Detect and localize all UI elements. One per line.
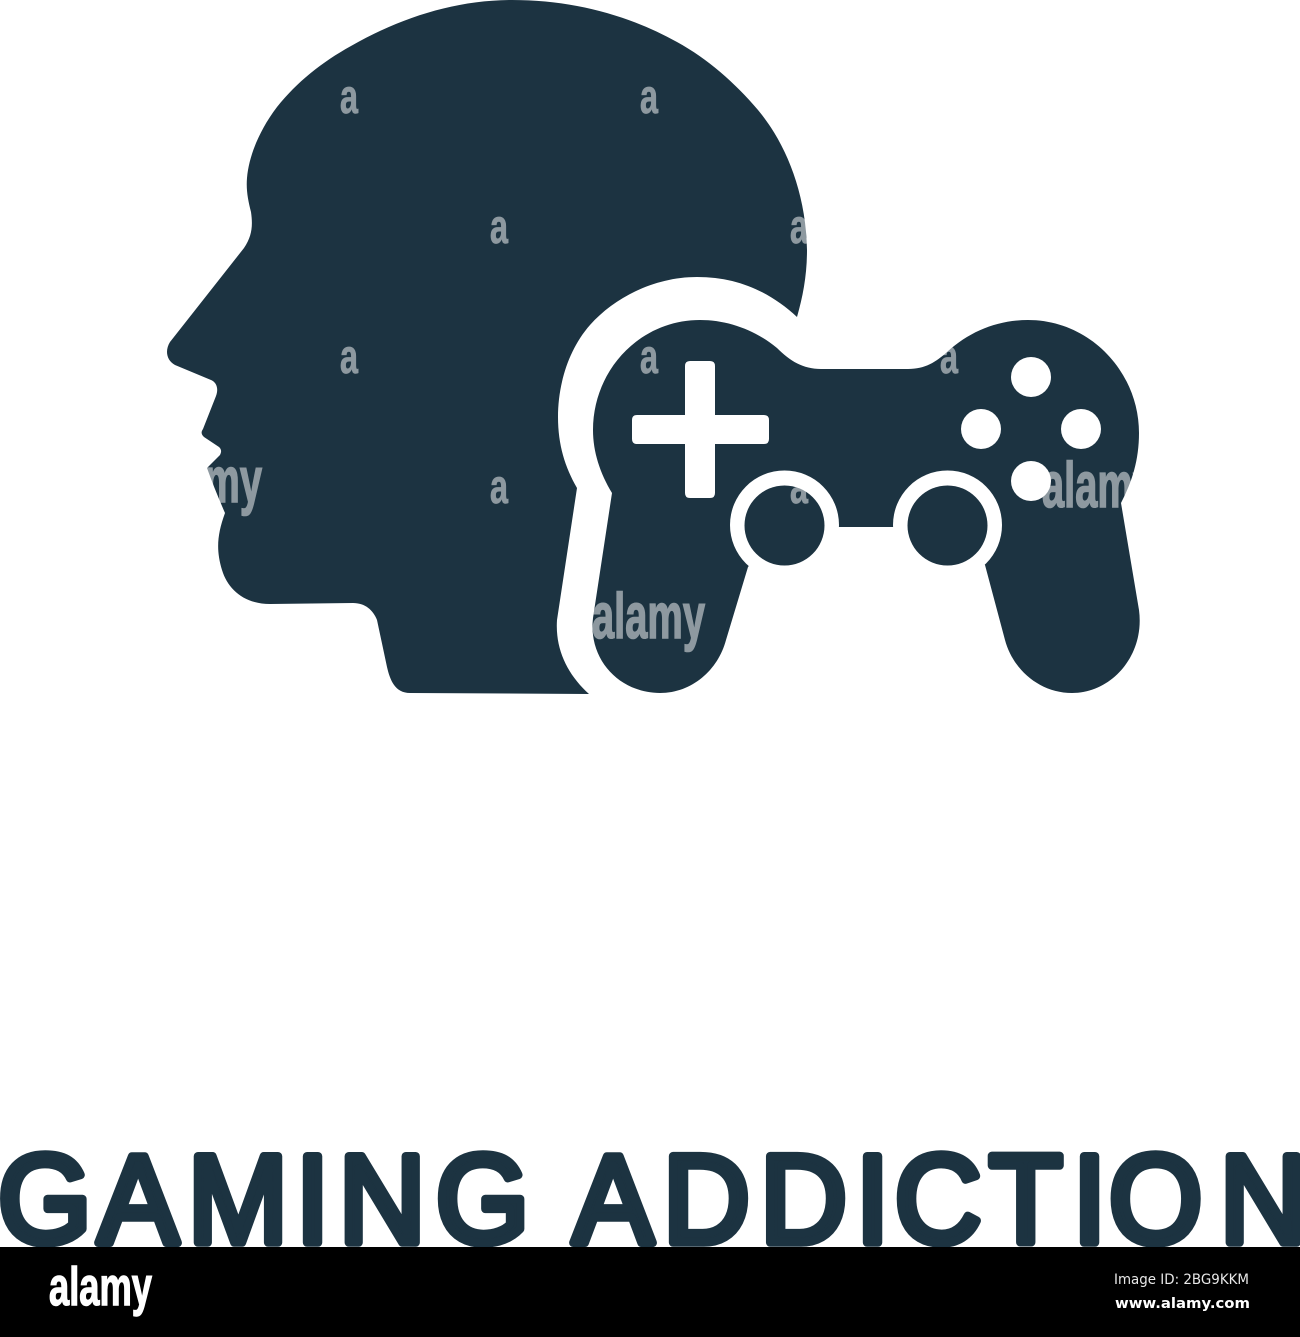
action buttons [961, 357, 1101, 501]
right thumbstick [893, 470, 1002, 580]
watermark: tiled alamy marks: a [340, 331, 358, 384]
watermark: tiled alamy marks: alamy [592, 580, 705, 652]
watermark: tiled alamy marks: alamy [149, 444, 262, 516]
icon: head silhouette [167, 0, 807, 694]
icon: game controller [592, 320, 1140, 693]
watermark: tiled alamy marks: a [340, 71, 358, 124]
watermark: tiled alamy marks: alamy [1042, 449, 1155, 521]
website: www.alamy.com [1115, 1296, 1250, 1312]
watermark: tiled alamy marks [149, 71, 1155, 652]
footer bar [0, 1247, 1300, 1337]
watermark: tiled alamy marks: a [640, 71, 658, 124]
watermark: tiled alamy marks: a [790, 201, 808, 254]
watermark: tiled alamy marks: a [640, 331, 658, 384]
left thumbstick [730, 470, 839, 580]
d-pad [632, 361, 769, 498]
watermark: tiled alamy marks: a [490, 201, 508, 254]
watermark: tiled alamy marks: a [490, 461, 508, 514]
title: GAMING ADDICTION [0, 1129, 1300, 1269]
controller body [592, 320, 1140, 693]
image id: Image ID: 2BG9KKM [1114, 1272, 1249, 1288]
footer logo: alamy [49, 1257, 152, 1317]
watermark: tiled alamy marks: a [940, 331, 958, 384]
watermark: tiled alamy marks: a [790, 461, 808, 514]
